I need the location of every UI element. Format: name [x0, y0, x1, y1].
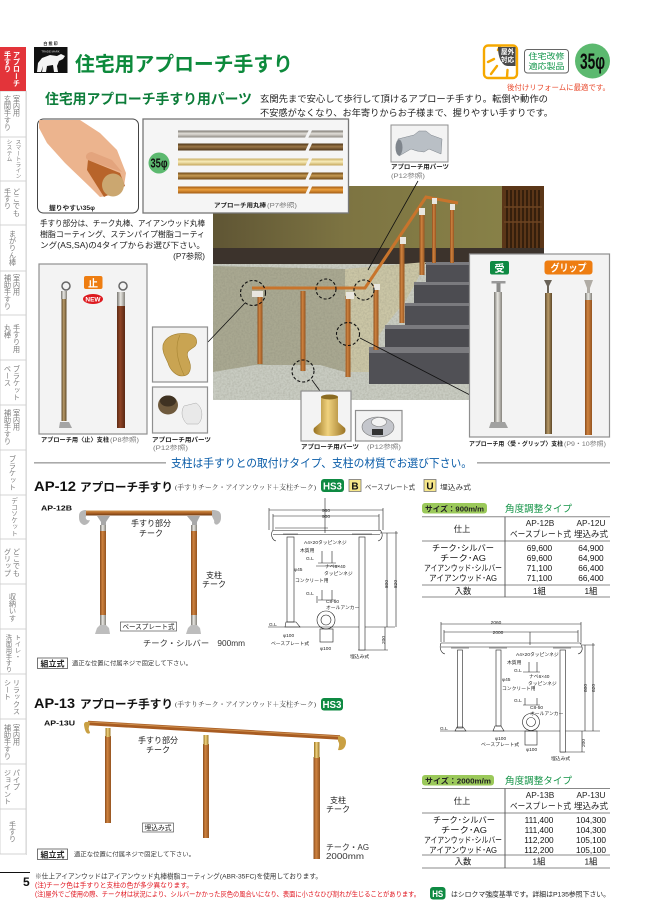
technical drawing: AP-13: コンクリート用: [502, 686, 536, 692]
caption: stop post: [41, 436, 139, 444]
left post: [95, 516, 110, 634]
assembly note: AP-13: 組立式: [40, 850, 64, 860]
assembly note: AP-12: 組立式: [40, 658, 64, 668]
table: AP-12 prices: 入数: [455, 586, 472, 596]
text: handrail types: (P7参照): [173, 251, 205, 261]
tab: active approach handrail: アプローチ: [12, 51, 22, 87]
badge: 35 phi: 35φ: [580, 49, 605, 74]
technical drawing: AP-12: ベースプレート式: [271, 640, 309, 647]
stairs: [369, 262, 469, 384]
tag: new: [83, 294, 103, 304]
panel: joint part: アプローチ用パーツ: [391, 163, 449, 171]
technical drawing: AP-12: コンクリート用: [295, 578, 329, 584]
technical drawing: AP-13: タッピンネジ: [528, 680, 557, 687]
side navigation tabs: 手すり: [8, 820, 18, 843]
panel: hand gripping rail: 握りやすい35φ: [49, 203, 95, 212]
caption: socket and ring parts: (P12参照): [367, 443, 401, 451]
caption: socket and ring parts: アプローチ用パーツ: [301, 443, 359, 451]
technical drawing: AP-12: G.L: [306, 556, 314, 562]
table: AP-12 prices: 66,400: [578, 573, 604, 583]
table: AP-13 prices: 1組: [585, 856, 598, 866]
technical drawing: AP-12: G.L: [306, 591, 314, 597]
technical drawing: AP-12: タッピンネジ: [324, 570, 353, 577]
blue heading with rules: 支柱は手すりとの取付けタイプ、支柱の材質でお選び下さい。: [171, 456, 472, 470]
table: AP-13 prices: 埋込み式: [574, 801, 609, 811]
heading: AP-12: アプローチ手すり: [80, 480, 173, 494]
technical drawing: AP-13: 木質用: [507, 659, 522, 666]
product photo: AP-13: チーク・AG: [326, 843, 369, 852]
side navigation tabs: システム: [5, 139, 12, 162]
bronze post: [544, 280, 552, 434]
table: AP-12 prices: 仕上: [454, 524, 470, 534]
product photo: AP-13: [44, 718, 369, 861]
technical drawing: AP-13: φ45: [502, 677, 511, 683]
panel: ring part: [356, 410, 402, 441]
text: handrail types: [40, 218, 205, 261]
silver post: [489, 281, 508, 428]
panel: round bar colours: (P7参照): [267, 202, 297, 210]
text: handrail types: ング(AS,SA)の4タイプからお選び下さい。: [40, 240, 205, 250]
tag: U embedded: U: [426, 482, 434, 492]
icon: polar bear trade mark: [34, 40, 68, 73]
technical drawing: AP-12: [268, 498, 399, 660]
page number: 5: [23, 875, 30, 889]
tag: B base plate: ベースプレート式: [365, 482, 415, 492]
tag: U embedded: 埋込み式: [440, 482, 471, 492]
side navigation tabs: どこでも: [12, 188, 22, 217]
side navigation tabs: ブラケット: [8, 454, 18, 491]
posts: [105, 728, 320, 859]
caption: receiver and grip posts: [469, 440, 606, 448]
table: AP-12 prices: 角度調整タイプ: [505, 503, 572, 515]
table: AP-12 prices: 64,900: [578, 543, 604, 553]
product photo: AP-13: 手すり部分: [138, 735, 178, 745]
product photo: AP-13: チーク: [146, 746, 170, 754]
table: AP-12 prices: 1組: [585, 586, 598, 596]
panel: joint part: (P12参照): [391, 172, 425, 180]
tag: new: NEW: [85, 296, 101, 304]
technical drawing: AP-13: 820: [591, 684, 597, 692]
table: AP-13 prices: 角度調整タイプ: [505, 775, 572, 787]
table: AP-13 prices: 1組: [533, 856, 546, 866]
table: AP-12 prices: 69,600: [527, 553, 553, 563]
tab: active approach handrail: [0, 47, 26, 91]
badge: 35 phi: [575, 44, 610, 78]
panel: wall caps: [152, 387, 208, 433]
badge: outdoor use sun icon: 屋外: [501, 47, 514, 56]
badge: housing renovation products: [524, 50, 568, 73]
table: AP-13 prices: AP-13B: [526, 790, 555, 800]
heading: AP-13: アプローチ手すり: [80, 697, 173, 711]
page number: [0, 872, 30, 889]
caption: parts: アプローチ用パーツ: [152, 436, 211, 444]
side navigation tabs: まがりん棒: [8, 230, 18, 267]
side navigation tabs: シート: [4, 679, 12, 701]
note: HS strength standard: [430, 887, 610, 900]
panel: joint part: [391, 125, 449, 180]
technical drawing: AP-12: 960: [322, 508, 330, 514]
technical drawing: AP-12: φ100: [283, 633, 294, 639]
label: base plate type: ベースプレート式: [122, 622, 175, 631]
technical drawing: AP-13: φ100: [526, 747, 537, 753]
technical drawing: AP-12: φ100: [320, 646, 331, 652]
product photo: AP-12: チーク: [202, 580, 226, 589]
technical drawing: AP-12: C8-50: [326, 599, 339, 605]
description text: 不安感がなくなり、お年寄りからお子様まで、握りやすい手すりです。: [260, 107, 553, 118]
caption: receiver and grip posts: (P9・10参照): [564, 440, 606, 448]
side navigation tabs: 手すり: [4, 187, 12, 210]
side navigation tabs: 洗面用手すり: [4, 633, 12, 673]
footnotes: (注)屋外でご使用の際、チーク材は状況により、シルバーかかった灰色の風合いになり、表面に小さなひび割れが生じることがあります。: [35, 890, 420, 898]
assembly note: AP-13: 適正な位置に付属ネジで固定して下さい。: [74, 850, 195, 858]
side navigation tabs: リラックス: [12, 679, 22, 715]
table: AP-13 prices: [422, 775, 610, 868]
side navigation tabs: 玄関手すり: [4, 94, 12, 131]
product photo: AP-12: [41, 504, 245, 648]
tag: grip: グリップ: [550, 262, 586, 274]
technical drawing: AP-13: オールアンカー: [530, 711, 564, 717]
technical drawing: AP-13: ベースプレート式: [481, 741, 519, 748]
assembly note: AP-12: [38, 658, 192, 668]
table: AP-13 prices: 仕上: [454, 796, 470, 806]
table: AP-13 prices: 112,200: [524, 835, 554, 845]
assembly note: AP-13: [38, 849, 195, 860]
technical drawing: AP-12: オールアンカー: [326, 605, 360, 611]
tag: B base plate: B: [351, 482, 359, 492]
technical drawing: AP-12: 埋込み式: [350, 653, 369, 660]
tag: stop: [84, 276, 102, 290]
35 phi mark: 35φ: [150, 156, 168, 170]
heading: AP-12: [34, 479, 471, 494]
tag: receiver: [490, 261, 509, 275]
technical drawing: AP-13: ナベ6×40: [529, 674, 550, 680]
table: AP-12 prices: 69,600: [527, 543, 553, 553]
table: AP-12 prices: 64,900: [578, 553, 604, 563]
product photo: AP-12: チーク: [139, 529, 163, 538]
product photo: AP-12: チーク・シルバー 900mm: [143, 639, 245, 648]
product photo: AP-13: 支柱: [330, 795, 346, 805]
assembly note: AP-12: 適正な位置に付属ネジで固定して下さい。: [72, 660, 192, 668]
technical drawing: AP-13: C8-50: [530, 705, 543, 711]
tag: stop: 止: [88, 277, 98, 290]
table: AP-12 prices: 66,400: [578, 563, 604, 573]
side navigation tabs: 室内用: [12, 94, 22, 118]
text: handrail types: 手すり部分は、チーク丸棒、アイアンウッド丸棒: [40, 218, 205, 228]
side navigation tabs: ジョイント: [4, 769, 12, 805]
technical drawing: AP-13: 埋込み式: [551, 755, 570, 762]
orange post: [584, 280, 593, 435]
technical drawing: AP-12: ナベ6×40: [325, 564, 346, 570]
badge: outdoor use sun icon: [484, 46, 517, 78]
side navigation tabs: スマートライン: [14, 139, 21, 179]
side navigation tabs: 補助手すり: [4, 408, 12, 445]
side navigation tabs: 室内用: [12, 723, 22, 747]
technical drawing: AP-12: 820: [393, 580, 399, 588]
table: AP-12 prices: 71,100: [527, 563, 553, 573]
heading: AP-13: AP-13: [34, 696, 76, 711]
tag: HS3: HS3: [323, 480, 342, 492]
table: AP-13 prices: アイアンウッド･シルバー: [424, 835, 502, 845]
side navigation tabs: [0, 47, 27, 855]
handrail in photo: [252, 197, 458, 377]
table: AP-13 prices: チーク･AG: [441, 825, 487, 835]
technical drawing: AP-12: G.L: [269, 622, 277, 628]
table: AP-12 prices: チーク･AG: [440, 553, 486, 563]
badge: housing renovation products: 適応製品: [528, 61, 564, 71]
technical drawing: AP-12: A4×20タッピンネジ: [304, 539, 347, 546]
icon: polar bear trade mark: 白 熊 印: [43, 40, 58, 46]
table: AP-12 prices: AP-12U: [576, 518, 606, 528]
side navigation tabs: ベース: [4, 365, 12, 387]
side navigation tabs: 補助手すり: [4, 273, 12, 310]
technical drawing: AP-13: φ100: [495, 736, 506, 742]
table: AP-13 prices: 104,300: [576, 825, 606, 835]
tab: active approach handrail: 手すり: [4, 50, 12, 74]
panel: socket part: [301, 391, 351, 441]
product photo: AP-12: AP-12B: [41, 504, 73, 512]
technical drawing: AP-13: A4×20タッピンネジ: [516, 651, 559, 658]
panel: receiver and grip posts: [470, 254, 610, 437]
table: AP-13 prices: チーク･シルバー: [433, 815, 495, 825]
tag: B base plate: [349, 480, 415, 492]
right post: [186, 516, 201, 634]
technical drawing: AP-13: G.L: [514, 698, 522, 704]
label: embedded type: [142, 823, 174, 832]
heading: AP-12: AP-12: [34, 479, 76, 494]
heading: AP-13: (手すりチーク・アイアンウッド＋支柱チーク): [175, 700, 316, 708]
technical drawing: AP-13: 800: [583, 684, 589, 692]
brown post: [117, 282, 127, 428]
side navigation tabs: ブラケット: [12, 364, 22, 401]
technical drawing: AP-12: 900: [322, 514, 330, 520]
side navigation tabs: グリップ: [4, 547, 12, 577]
caption: socket and ring parts: [301, 443, 401, 451]
side navigation tabs: 室内用: [12, 273, 22, 297]
side navigation tabs: 室内用: [12, 408, 22, 432]
technical drawing: AP-12: 800: [384, 580, 390, 588]
caption: stop post: アプローチ用〈止〉支柱: [41, 436, 110, 444]
size badge: サイズ：2000m/m: [425, 776, 491, 786]
technical drawing: AP-13: [440, 620, 600, 762]
technical drawing: AP-13: 200: [581, 739, 587, 747]
35 phi mark: [148, 152, 170, 174]
table: AP-13 prices: 104,300: [576, 815, 606, 825]
description text: 玄関先まで安心して歩行して頂けるアプローチ手すり。転倒や動作の: [260, 93, 548, 104]
caption: parts: (P12参照): [153, 444, 188, 452]
product photo: AP-13: チーク: [326, 805, 350, 814]
panel: hand gripping rail: [38, 119, 138, 213]
side navigation tabs: トイレ・: [14, 634, 21, 660]
subheading: parts: 住宅用アプローチ手すり用パーツ: [45, 91, 252, 107]
main photo: stairs with handrail: [213, 186, 544, 400]
tag: HS3: HS3: [322, 699, 342, 711]
size badge: サイズ：900m/m: [425, 504, 484, 514]
tag: U embedded: [424, 480, 471, 492]
table: AP-12 prices: チーク･シルバー: [432, 543, 494, 553]
table: AP-12 prices: ベースプレート式: [510, 529, 572, 539]
tag: grip: [544, 260, 592, 274]
panel: round bar colours: [143, 119, 348, 213]
note: HS strength standard: HS: [432, 889, 443, 900]
badge: outdoor use sun icon: 対応: [501, 55, 514, 64]
technical drawing: AP-13: 2060: [491, 620, 502, 626]
table: AP-12 prices: 埋込み式: [574, 529, 609, 539]
footnotes: [35, 872, 420, 898]
hand: [39, 120, 126, 197]
technical drawing: AP-13: G.L: [440, 726, 448, 732]
product photo: AP-12: 手すり部分: [131, 518, 171, 528]
silver post: [59, 282, 72, 428]
label: embedded type: 埋込み式: [144, 823, 172, 832]
technical drawing: AP-13: G.L: [514, 668, 522, 674]
technical drawing: AP-12: 200: [381, 636, 387, 644]
icon: polar bear trade mark: TRADE MARK: [41, 50, 60, 54]
table: AP-13 prices: 112,200: [524, 845, 554, 855]
table: AP-13 prices: 111,400: [525, 815, 554, 825]
leader lines and dashed detail circles: [208, 181, 470, 395]
side navigation tabs: 補助手すり: [4, 723, 12, 760]
product photo: AP-13: 2000mm: [326, 852, 364, 861]
tag: receiver: 受: [494, 262, 504, 275]
table: AP-12 prices: アイアンウッド･シルバー: [424, 563, 502, 573]
side navigation tabs: 収納いす: [8, 592, 18, 622]
footnotes: (注)チーク色は手すりと支柱の色が多少異なります。: [35, 880, 193, 890]
rail: [79, 510, 221, 525]
table: AP-13 prices: 105,100: [576, 845, 606, 855]
table: AP-13 prices: 105,100: [576, 835, 606, 845]
panel: round bar colours: アプローチ用丸棒: [214, 202, 267, 210]
side navigation tabs: 丸棒: [3, 323, 12, 340]
heading: AP-13: [34, 696, 343, 711]
table: AP-13 prices: ベースプレート式: [510, 801, 572, 811]
side navigation tabs: どこでも: [12, 548, 22, 577]
table: AP-12 prices: 1組: [533, 586, 547, 596]
red note: best for retrofit: 後付けリフォームに最適です。: [507, 83, 610, 92]
door lattice: [502, 186, 544, 254]
table: AP-13 prices: 入数: [455, 856, 472, 866]
title: 住宅用アプローチ手すり: [75, 53, 293, 76]
panel: elbow end cap: [152, 327, 208, 382]
badge: housing renovation products: 住宅改修: [528, 51, 564, 61]
table: AP-12 prices: AP-12B: [526, 518, 555, 528]
side navigation tabs: 手すり用: [12, 323, 22, 354]
technical drawing: AP-12: φ45: [294, 567, 303, 573]
caption: parts: [152, 436, 211, 452]
table: AP-13 prices: AP-13U: [576, 790, 606, 800]
table: AP-13 prices: 111,400: [525, 825, 554, 835]
text: handrail types: 樹脂コーティング、ステンパイプ樹脂コーティ: [40, 229, 205, 239]
sloped rail: [84, 722, 346, 750]
product photo: AP-13: AP-13U: [44, 718, 76, 728]
side navigation tabs: デコソケット: [10, 496, 18, 537]
side navigation tabs: パイプ: [12, 769, 22, 791]
caption: receiver and grip posts: アプローチ用〈受・グリップ〉支柱: [469, 440, 564, 448]
table: AP-12 prices: [422, 503, 610, 597]
table: AP-13 prices: アイアンウッド･AG: [429, 845, 497, 855]
panel: stop type posts: [39, 264, 147, 434]
footnotes: ※仕上アイアンウッドはアイアンウッド丸棒樹脂コーティング(ABR-35FC)を使用しております。: [35, 872, 322, 880]
technical drawing: AP-13: 2000: [493, 630, 504, 636]
product photo: AP-12: 支柱: [206, 570, 222, 580]
heading: AP-12: (手すりチーク・アイアンウッド＋支柱チーク): [175, 482, 316, 492]
description text: [260, 93, 553, 118]
note: HS strength standard: はシロクマ強度基準です。詳細はP135参照下さい。: [451, 890, 610, 898]
table: AP-12 prices: 71,100: [527, 573, 553, 583]
table: AP-12 prices: アイアンウッド･AG: [429, 573, 497, 583]
technical drawing: AP-12: 木質用: [300, 547, 315, 554]
caption: stop post: (P8参照): [110, 436, 139, 444]
